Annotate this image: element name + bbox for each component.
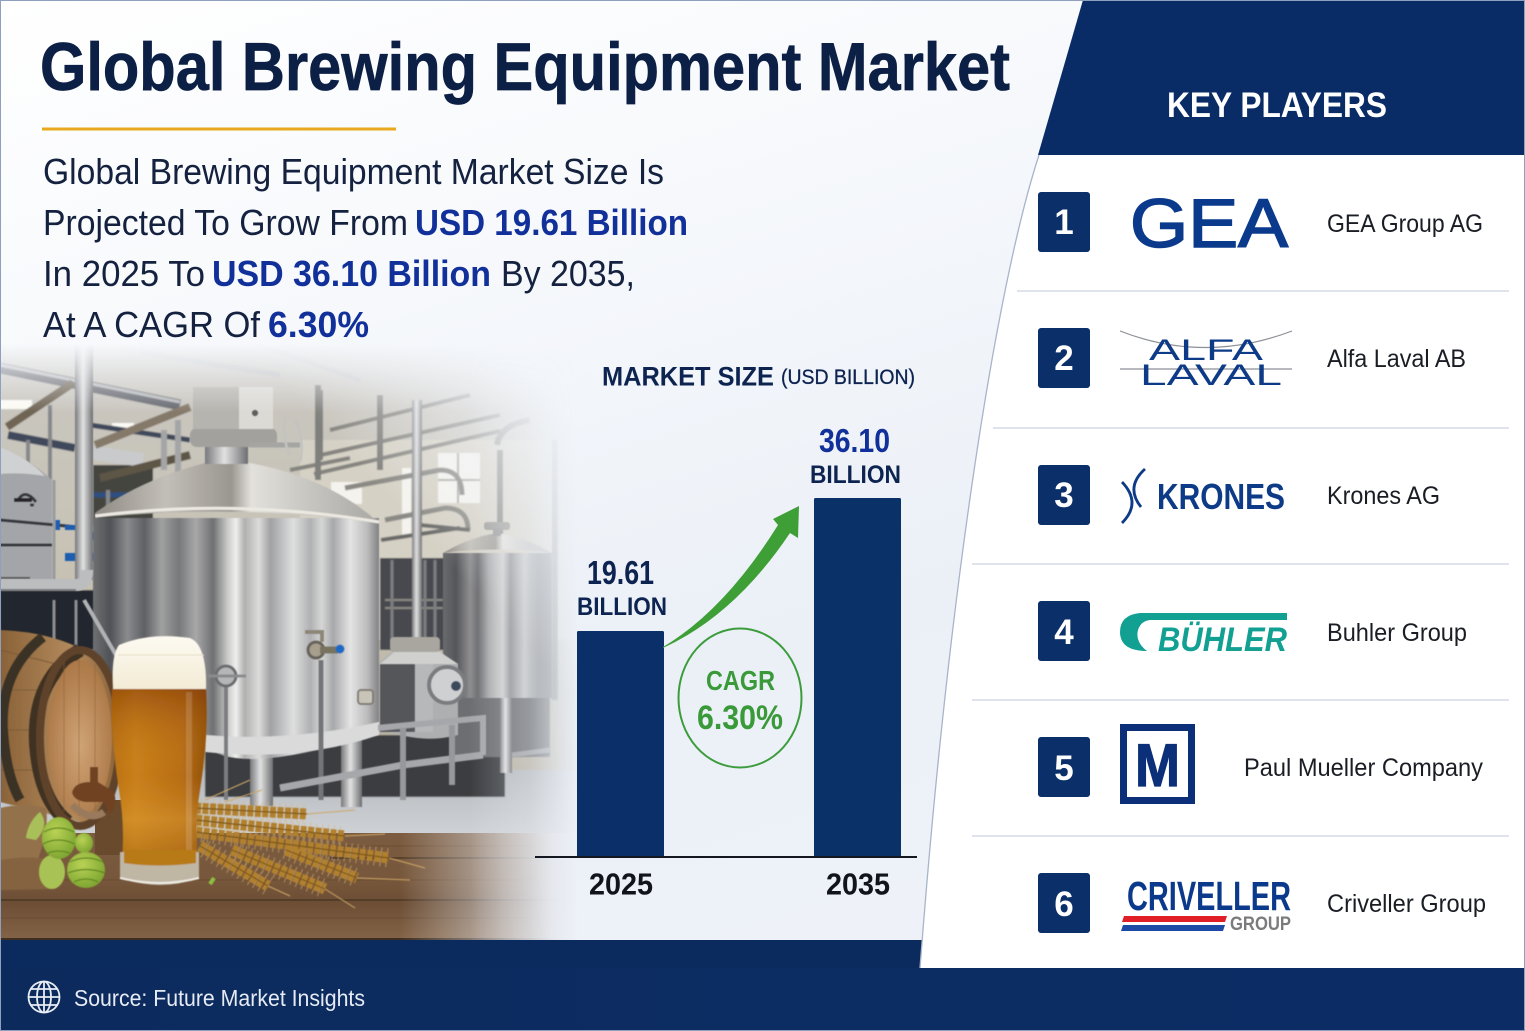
- bottom navy strip: [0, 940, 925, 970]
- hop cones and sack: [0, 805, 214, 890]
- summary text block: 6.30%: [268, 304, 369, 345]
- glass of beer: [112, 636, 207, 885]
- player 5: Paul Mueller: M: [1135, 732, 1180, 799]
- player 5: Paul Mueller: Paul Mueller Company: [1244, 754, 1483, 782]
- ceiling pipes: [0, 368, 180, 405]
- wooden table: [0, 833, 620, 940]
- straw rope behind the glass: [95, 800, 125, 855]
- panel header: [1038, 0, 1525, 155]
- CAGR circle: 6.30%: [697, 699, 783, 737]
- summary text block: By 2035,: [501, 253, 635, 294]
- player 6: Criveller: CRIVELLER: [1127, 873, 1291, 919]
- player 6: Criveller: Criveller Group: [1327, 890, 1486, 918]
- summary text block: Global Brewing Equipment Market Size Is: [43, 151, 664, 192]
- player 3: Krones: [1038, 465, 1440, 525]
- icon: globe: [28, 982, 60, 1012]
- value 2035: [810, 422, 901, 489]
- player 1: GEA: GEA Group AG: [1327, 210, 1483, 238]
- player 2: Alfa Laval: ALFA: [1149, 334, 1263, 367]
- summary text block: [43, 151, 688, 345]
- player 3: Krones: KRONES: [1157, 476, 1285, 517]
- title: Global Brewing Equipment Market: [40, 29, 1010, 105]
- right tank: [443, 522, 552, 773]
- bar chart: market size: [535, 362, 917, 902]
- panel background: [920, 0, 1525, 968]
- value 2025: 19.61: [587, 554, 654, 591]
- player 4: Buhler: BÜHLER: [1158, 621, 1287, 659]
- barrel tap: [72, 767, 115, 814]
- chart heading: MARKET SIZE: [602, 362, 774, 392]
- footer bar: [0, 968, 1525, 1031]
- summary text block: At A CAGR Of: [43, 304, 261, 345]
- year labels: 2035: [826, 866, 890, 902]
- CAGR circle: CAGR: [706, 665, 775, 696]
- player 4: Buhler: 4: [1054, 613, 1074, 652]
- summary text block: USD 19.61 Billion: [415, 202, 688, 243]
- summary text block: In 2025 To: [43, 253, 205, 294]
- small process vessel: [280, 637, 483, 800]
- chart heading: (USD BILLION): [781, 366, 915, 389]
- player 1: GEA: [1038, 185, 1483, 262]
- CAGR circle: [678, 628, 802, 768]
- player 2: Alfa Laval: [1038, 328, 1466, 392]
- panel: key players: [920, 0, 1525, 968]
- value 2035: 36.10: [819, 422, 890, 459]
- player 3: Krones: Krones AG: [1327, 482, 1440, 510]
- panel heading: KEY PLAYERS: [1167, 86, 1387, 125]
- brewery background wall and floor: [1, 352, 572, 833]
- player 6: Criveller: [1038, 873, 1486, 935]
- valve fittings on tank: [208, 632, 344, 800]
- tank legs: [250, 735, 362, 807]
- player 4: Buhler: Buhler Group: [1327, 619, 1467, 647]
- photo: brewery with tanks, barrel, beer and wheat: [0, 338, 620, 940]
- summary text block: Projected To Grow From: [43, 202, 408, 243]
- left tank: [1, 448, 94, 580]
- main fermentation tank: [93, 387, 379, 807]
- bar 2035: [814, 498, 901, 857]
- wooden barrel with tap: [0, 630, 120, 826]
- value 2025: BILLION: [577, 593, 667, 621]
- vertical and horizontal foreground pipes: [0, 340, 116, 655]
- player 1: GEA: 1: [1054, 203, 1074, 242]
- player 2: Alfa Laval: 2: [1054, 339, 1074, 378]
- value 2035: BILLION: [810, 461, 901, 489]
- player 3: Krones: 3: [1054, 476, 1074, 515]
- year labels: [589, 866, 890, 902]
- player 5: Paul Mueller: [1038, 728, 1483, 800]
- wheat sheaf: [195, 780, 425, 908]
- player 5: Paul Mueller: 5: [1054, 749, 1074, 788]
- bar 2025: [577, 631, 664, 857]
- player 1: GEA: GEA: [1130, 185, 1288, 262]
- summary text block: USD 36.10 Billion: [212, 253, 491, 294]
- player 2: Alfa Laval: Alfa Laval AB: [1327, 345, 1466, 373]
- value 2025: [577, 554, 667, 621]
- title underline: [42, 128, 396, 130]
- source text: Source: Future Market Insights: [74, 985, 365, 1011]
- arrow: growth: [663, 506, 799, 648]
- axis line: [535, 856, 917, 858]
- player 4: Buhler: [1038, 601, 1467, 661]
- chart heading: [602, 362, 915, 392]
- player 6: Criveller: 6: [1054, 885, 1074, 924]
- player 2: Alfa Laval: LAVAL: [1140, 359, 1282, 392]
- player 6: Criveller: GROUP: [1230, 914, 1291, 935]
- year labels: 2025: [589, 866, 653, 902]
